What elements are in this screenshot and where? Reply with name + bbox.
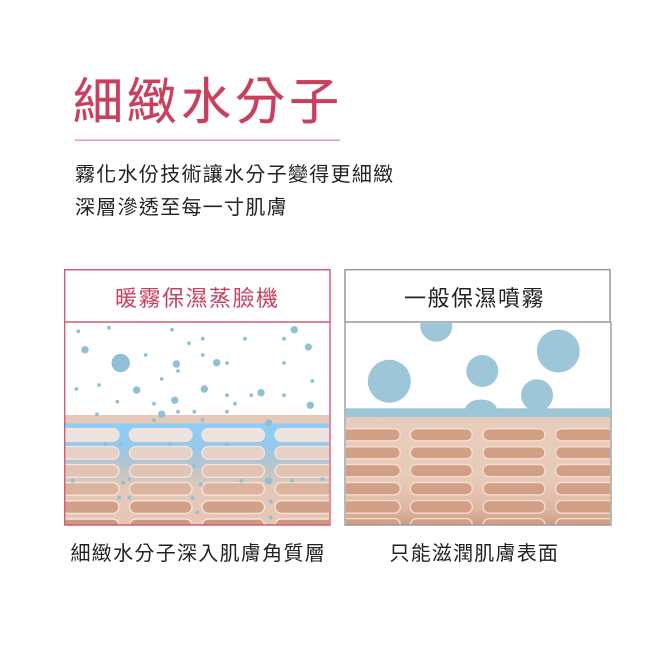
panel frame [65,322,330,525]
water molecules: fine [71,326,324,520]
heading: facial steamer [65,270,330,322]
skin diagram: surface only [346,322,610,524]
panel: regular mist [344,268,612,526]
heading: regular mist: 一般保濕噴霧 [404,286,545,311]
caption: left: 細緻水分子深入肌膚角質層 [70,542,326,565]
description text: 霧化水份技術讓水分子變得更細緻 [75,163,394,186]
description text: 深層滲透至每一寸肌膚 [75,196,288,219]
title: 細緻水分子 [73,74,343,130]
panel: facial steamer [64,268,331,526]
title underline [75,140,340,141]
caption: right: 只能滋潤肌膚表面 [390,542,559,565]
skin diagram: fine molecules penetrating [65,415,329,524]
heading: facial steamer: 暖霧保濕蒸臉機 [115,286,280,311]
heading: regular mist [345,270,610,322]
water molecules: large [346,322,610,418]
description text [75,163,394,219]
panel frame [345,322,611,525]
